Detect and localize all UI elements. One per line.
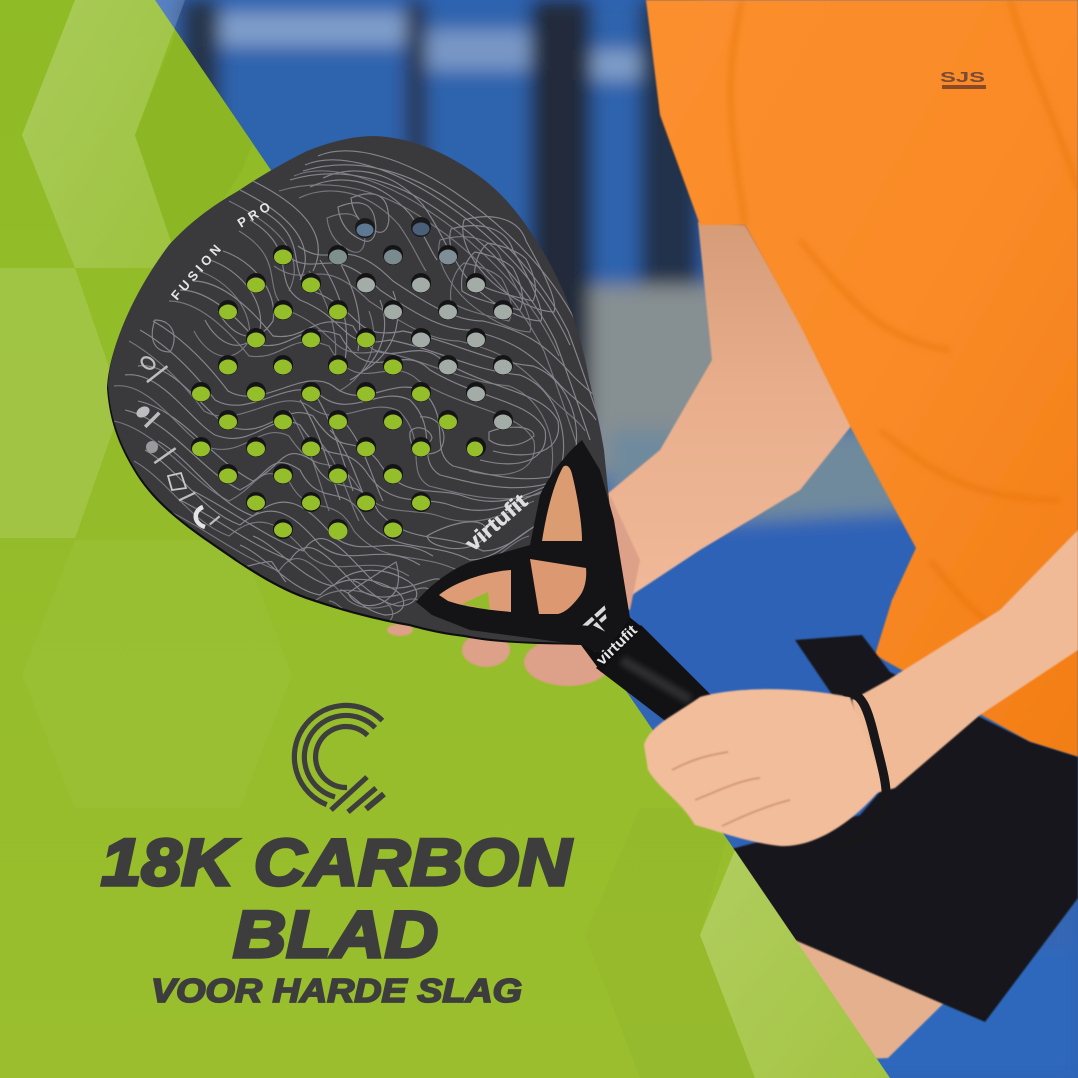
racket face	[108, 136, 625, 652]
fingers behind racket	[387, 495, 640, 686]
technology icons	[134, 355, 220, 527]
finger creases	[672, 752, 790, 826]
subheading: VOOR HARDE SLAG	[151, 972, 522, 1009]
dark blue holes	[355, 217, 431, 238]
grey holes	[329, 250, 512, 430]
throat opening upper	[542, 466, 582, 541]
hand gripping handle	[644, 689, 884, 846]
racket model name: FUSION	[168, 239, 226, 303]
shirt brand logo: SJS	[940, 69, 985, 86]
racket holes	[191, 217, 513, 540]
shirt folds	[731, 0, 1078, 660]
player right arm	[606, 222, 852, 595]
light hexagon left	[0, 268, 122, 538]
padel racket	[107, 136, 714, 723]
shirt brand logo	[940, 69, 986, 89]
handle brand name: virtufit	[593, 622, 641, 669]
racket outer rim	[107, 139, 643, 672]
light hexagon bottom right	[700, 850, 890, 1078]
carbon logo icon	[294, 705, 384, 812]
heading	[101, 825, 572, 1009]
player left forearm	[852, 530, 1078, 795]
heading line two: BLAD	[233, 897, 438, 971]
green holes	[192, 250, 483, 540]
throat opening left	[439, 570, 511, 612]
racket handle	[596, 625, 714, 723]
orange shirt	[646, 0, 1078, 757]
dark hexagon top	[135, 32, 253, 235]
soft hexagon bottom	[585, 808, 755, 1078]
soft hexagon middle	[22, 540, 292, 808]
throat frame	[416, 440, 630, 655]
holes showing court	[356, 222, 430, 236]
light hexagon top	[22, 0, 185, 268]
topographic contour lines	[114, 151, 609, 626]
player leg	[790, 935, 985, 1060]
padel racket: PRO	[235, 197, 276, 231]
heading line one: 18K CARBON	[101, 825, 572, 899]
hole shadows	[191, 245, 513, 539]
throat brand mark	[582, 605, 618, 640]
wristband	[835, 692, 886, 846]
throat opening lower	[530, 559, 586, 614]
black shorts	[720, 635, 1078, 1022]
racket brand name: virtufit	[461, 490, 532, 556]
